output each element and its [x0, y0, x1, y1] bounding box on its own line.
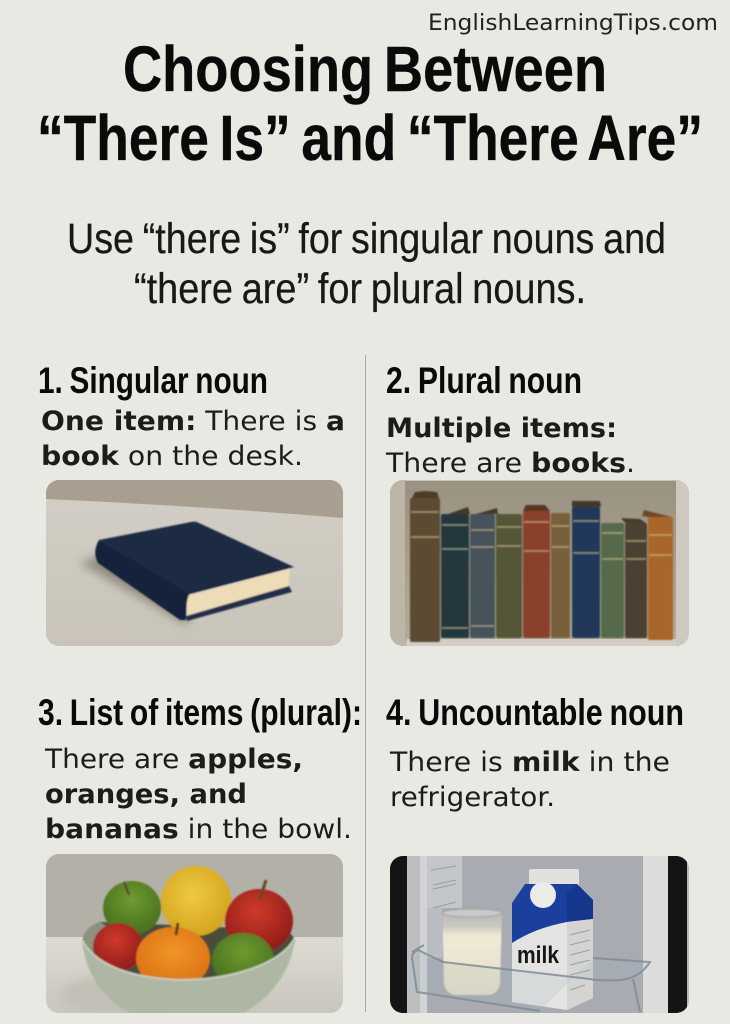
text: list example	[44, 744, 352, 845]
panel: plural noun	[385, 360, 689, 646]
image: book on desk	[46, 480, 343, 646]
website credit: EnglishLearningTips.com	[428, 11, 718, 36]
panel: uncountable noun	[386, 692, 689, 1013]
title: Choosing Between	[123, 33, 607, 105]
text: list example: There are apples,	[44, 744, 303, 775]
text: list example: oranges, and	[45, 779, 247, 810]
heading: plural noun: 2. Plural noun	[386, 360, 582, 401]
panel: singular noun	[38, 360, 345, 646]
heading: list of items: 3. List of items (plural):	[38, 692, 362, 733]
subtitle: “there are” for plural nouns.	[134, 265, 586, 313]
text: singular example: book on the desk.	[41, 441, 303, 472]
subtitle	[67, 215, 666, 313]
text: uncountable example: refrigerator.	[390, 782, 555, 813]
milk carton	[512, 869, 593, 1010]
text: plural example: There are books.	[385, 448, 635, 479]
text: plural example: Multiple items:	[386, 413, 617, 444]
title	[37, 33, 703, 174]
text: singular example	[41, 406, 345, 472]
heading: singular noun: 1. Singular noun	[38, 360, 268, 401]
bowl body	[82, 938, 295, 1013]
milk carton: milk	[517, 942, 560, 969]
text: plural example	[385, 413, 635, 479]
books	[410, 491, 673, 642]
glass of milk	[442, 908, 502, 995]
text: list example: bananas in the bowl.	[45, 814, 352, 845]
fridge shelf	[412, 945, 650, 1012]
panel: list of items	[38, 692, 362, 1015]
bowl interior	[100, 921, 296, 979]
book bands	[411, 511, 672, 629]
image: shelf of books	[390, 480, 689, 646]
image: milk in refrigerator	[389, 856, 689, 1013]
image: fruit bowl	[46, 854, 343, 1015]
text: uncountable example: There is milk in the	[389, 747, 670, 778]
text: singular example: One item: There is a	[41, 406, 345, 437]
text: uncountable example	[389, 747, 670, 813]
